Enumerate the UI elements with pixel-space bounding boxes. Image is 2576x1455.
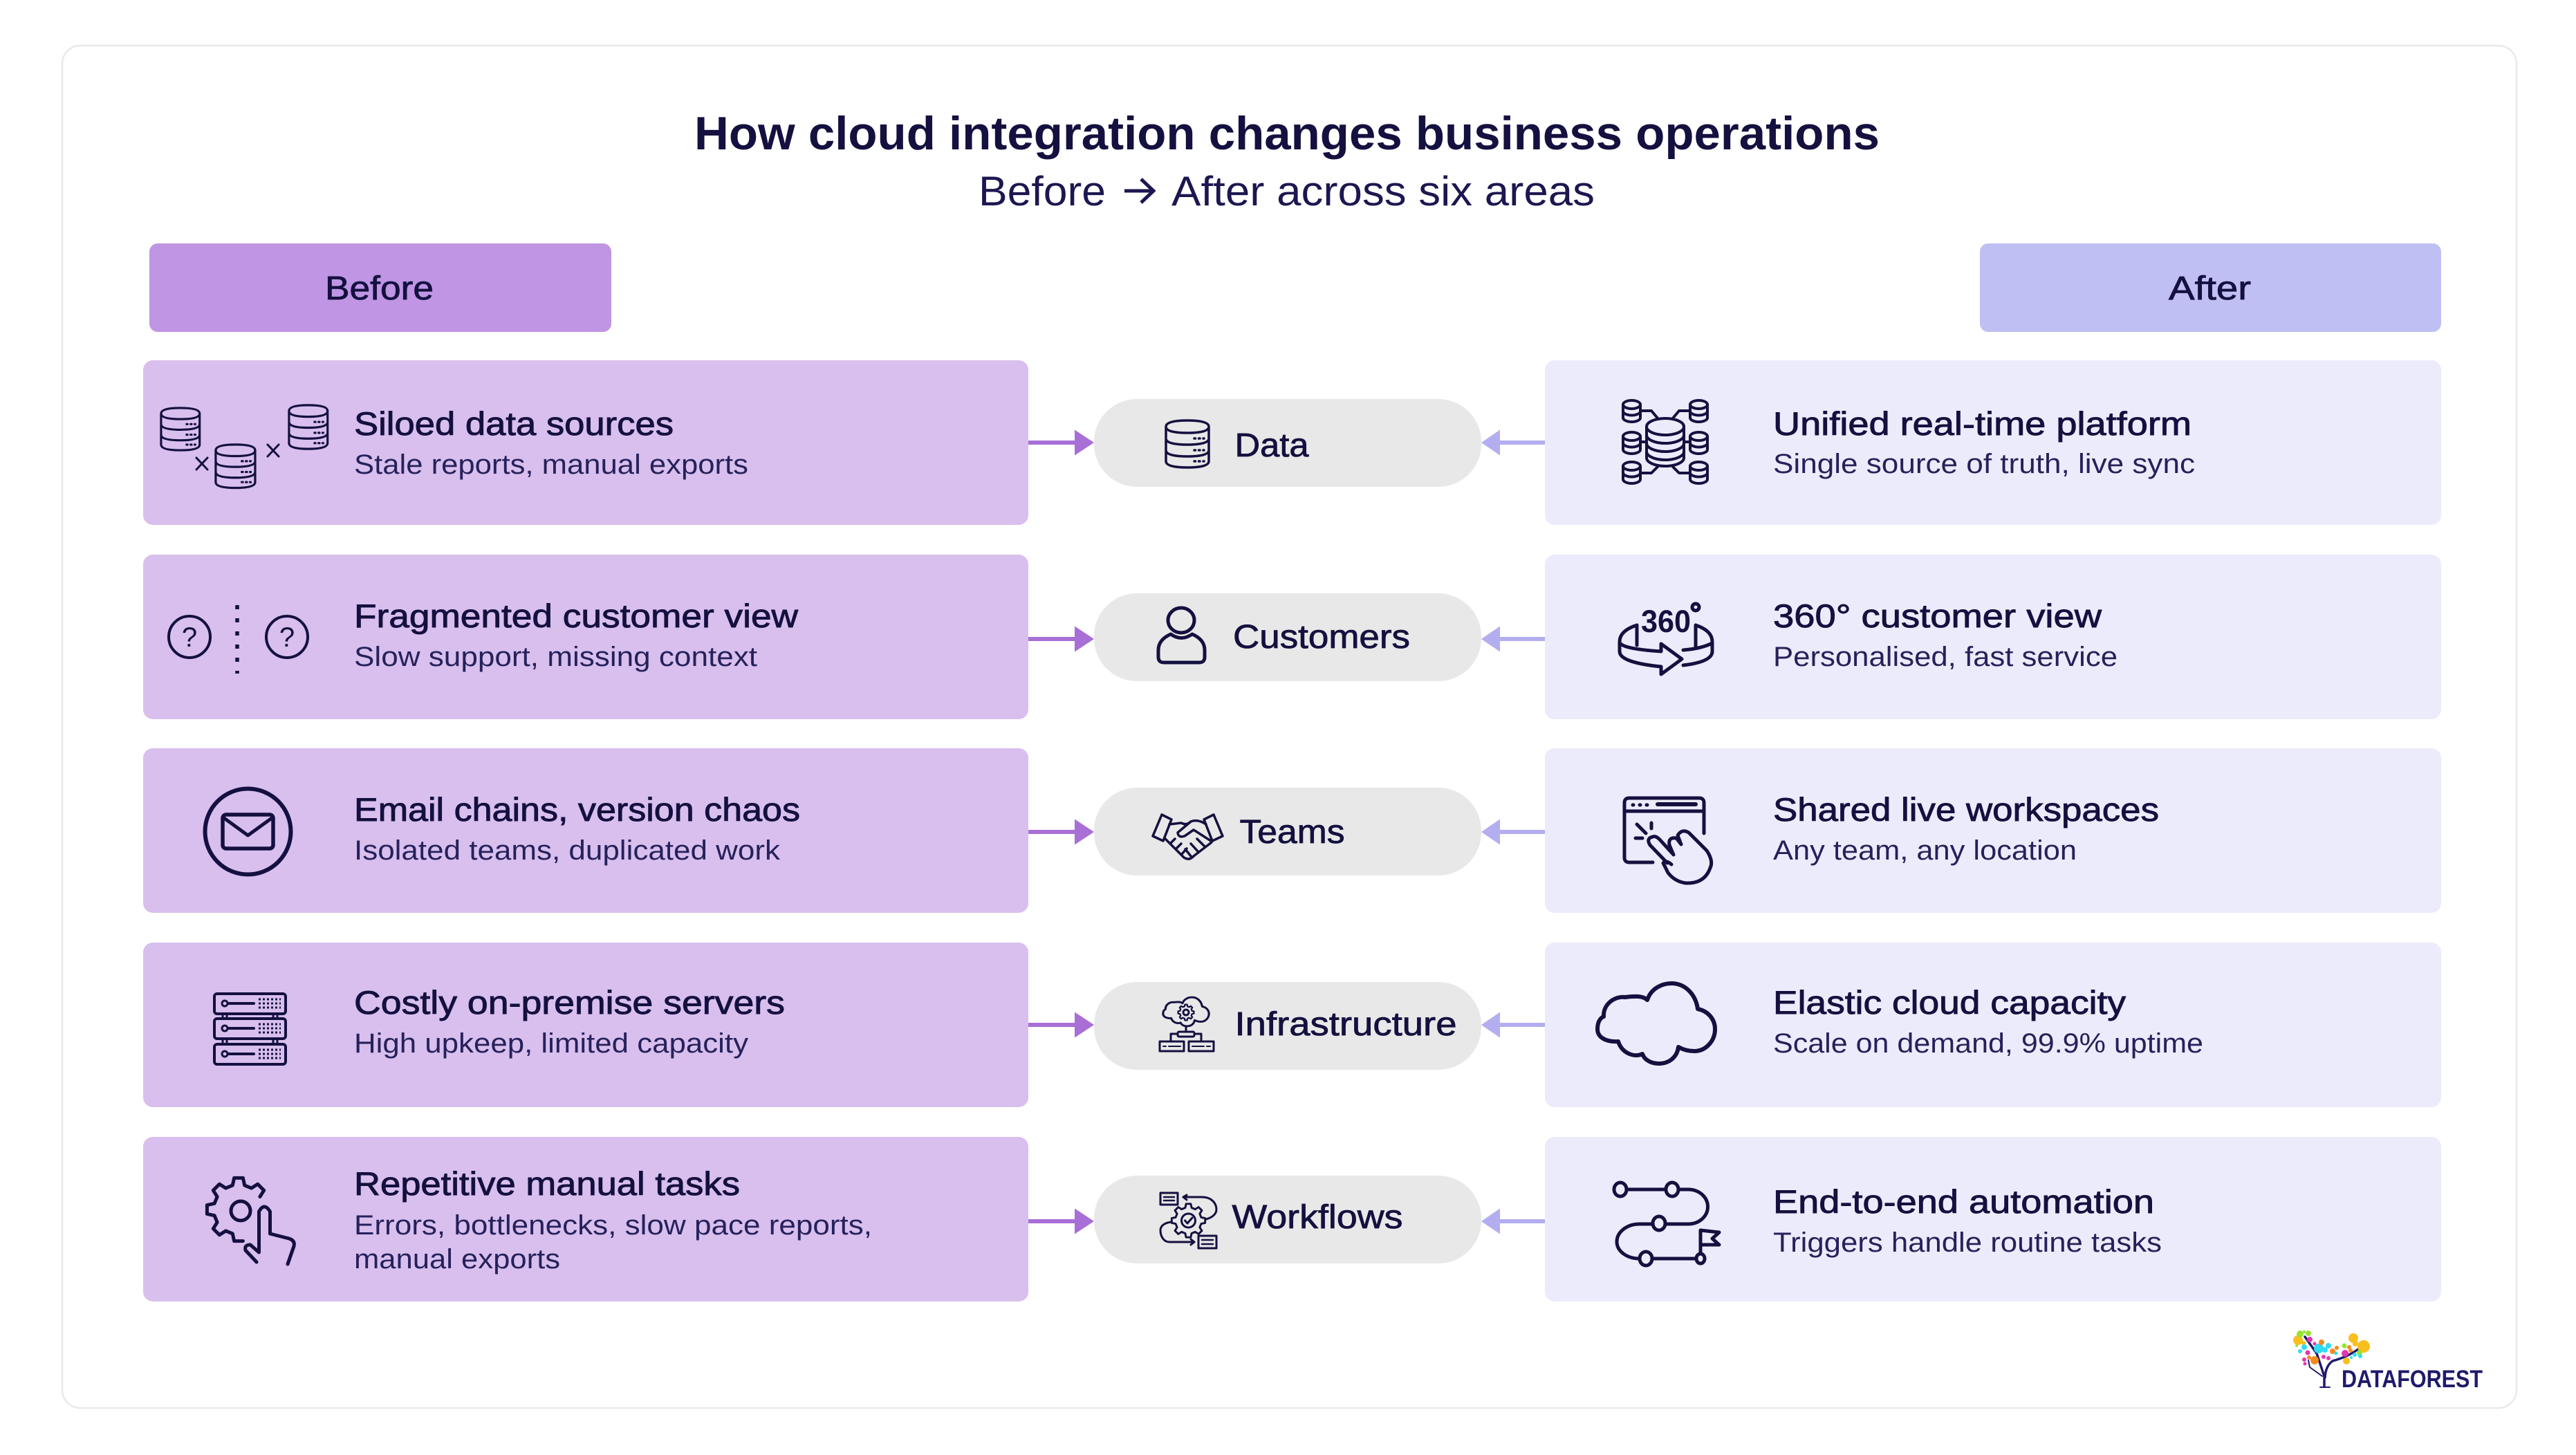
row subtext: Any team, any location <box>1773 835 2077 866</box>
heading: After: After <box>2169 270 2251 307</box>
row subtext: Triggers handle routine tasks <box>1773 1227 2162 1258</box>
panel: before row 1, siloed data <box>143 360 1028 525</box>
subtitle: After across six areas <box>1171 168 1595 214</box>
row subtext: Errors, bottlenecks, slow pace reports, <box>354 1210 872 1241</box>
row subtext: High upkeep, limited capacity <box>354 1028 748 1059</box>
icon: workflow gear <box>1160 1193 1216 1248</box>
arrow: before workflows <box>1028 1209 1094 1234</box>
arrow: before customers <box>1028 627 1094 651</box>
icon: envelope in circle <box>205 788 290 874</box>
pill label: Data <box>1235 427 1309 464</box>
pill label: Teams <box>1239 814 1344 851</box>
row subtext: Isolated teams, duplicated work <box>354 835 781 866</box>
title: How cloud integration changes business operations <box>694 107 1880 160</box>
icon: 360 rotation <box>1620 604 1712 674</box>
icon: tree trunk <box>2305 1337 2358 1387</box>
arrow: before teams <box>1028 819 1094 845</box>
panel: before row 4, servers <box>143 943 1028 1107</box>
heading: Before: Before <box>325 270 434 307</box>
icon: disconnected question marks: ? <box>279 622 295 653</box>
arrow: after infrastructure <box>1481 1012 1545 1037</box>
icon: database <box>1166 420 1209 467</box>
subtitle: Before <box>979 168 1106 214</box>
icon: disconnected question marks <box>169 605 308 674</box>
panel: after row 1, unified platform <box>1545 360 2441 525</box>
subtitle <box>979 168 1595 214</box>
row text: Unified real-time platform <box>1773 405 2192 442</box>
icon: three separated databases <box>161 405 328 488</box>
arrow: after data <box>1481 430 1545 455</box>
pill label: Workflows <box>1232 1199 1402 1236</box>
row text: Repetitive manual tasks <box>354 1165 740 1202</box>
arrow: after workflows <box>1481 1209 1545 1234</box>
row text: Shared live workspaces <box>1773 791 2159 828</box>
icon: gear and pointing hand <box>207 1178 294 1264</box>
icon: window with touching hand <box>1624 798 1712 883</box>
row subtext: Single source of truth, live sync <box>1773 449 2195 479</box>
logo: Dataforest <box>2293 1331 2483 1393</box>
pill label: Customers <box>1233 619 1410 656</box>
icon: connected databases <box>1623 400 1707 483</box>
row text: End-to-end automation <box>1773 1183 2154 1220</box>
icon: coloured nodes <box>2293 1331 2370 1365</box>
row text: 360° customer view <box>1773 597 2102 634</box>
icon: 360 rotation: 360 <box>1641 604 1691 639</box>
row subtext: Personalised, fast service <box>1773 642 2118 672</box>
panel: after row 5, automation <box>1545 1137 2441 1301</box>
panel: before row 5, manual tasks <box>143 1137 1028 1301</box>
row text: Siloed data sources <box>354 405 674 442</box>
row subtext: Scale on demand, 99.9% uptime <box>1773 1028 2203 1059</box>
icon: person <box>1158 608 1205 662</box>
panel: pill Customers <box>1094 593 1481 681</box>
row text: Costly on-premise servers <box>354 984 785 1021</box>
row subtext <box>354 1210 872 1275</box>
icon: automation path with flag <box>1614 1183 1719 1266</box>
row subtext: Stale reports, manual exports <box>354 450 748 480</box>
arrow: after teams <box>1481 819 1545 845</box>
panel: pill Teams <box>1094 788 1481 875</box>
panel: after row 2, 360 view <box>1545 555 2441 719</box>
logo wordmark: DATAFOREST <box>2342 1366 2483 1393</box>
panel: after row 3, workspaces <box>1545 748 2441 913</box>
icon: handshake <box>1153 815 1223 859</box>
arrow: after customers <box>1481 627 1545 651</box>
panel: pill Workflows <box>1094 1176 1481 1263</box>
icon: disconnected question marks: ? <box>182 622 197 653</box>
row text: Fragmented customer view <box>354 597 799 634</box>
heading: After <box>1980 243 2441 332</box>
heading: Before <box>149 243 611 332</box>
arrow: before data <box>1028 430 1094 455</box>
row text: Elastic cloud capacity <box>1773 984 2126 1021</box>
panel: pill Data <box>1094 399 1481 487</box>
panel: before row 3, email chains <box>143 748 1028 913</box>
panel: after row 4, cloud capacity <box>1545 943 2441 1107</box>
icon: cloud <box>1597 983 1715 1064</box>
panel: before row 2, fragmented view <box>143 555 1028 719</box>
row subtext: Slow support, missing context <box>354 642 757 672</box>
icon: server rack <box>214 994 286 1064</box>
row text: Email chains, version chaos <box>354 791 800 828</box>
icon: cloud network <box>1160 997 1214 1051</box>
arrow: before infrastructure <box>1028 1012 1094 1037</box>
panel: pill Infrastructure <box>1094 982 1481 1070</box>
pill label: Infrastructure <box>1235 1006 1456 1043</box>
row subtext: manual exports <box>354 1244 560 1275</box>
